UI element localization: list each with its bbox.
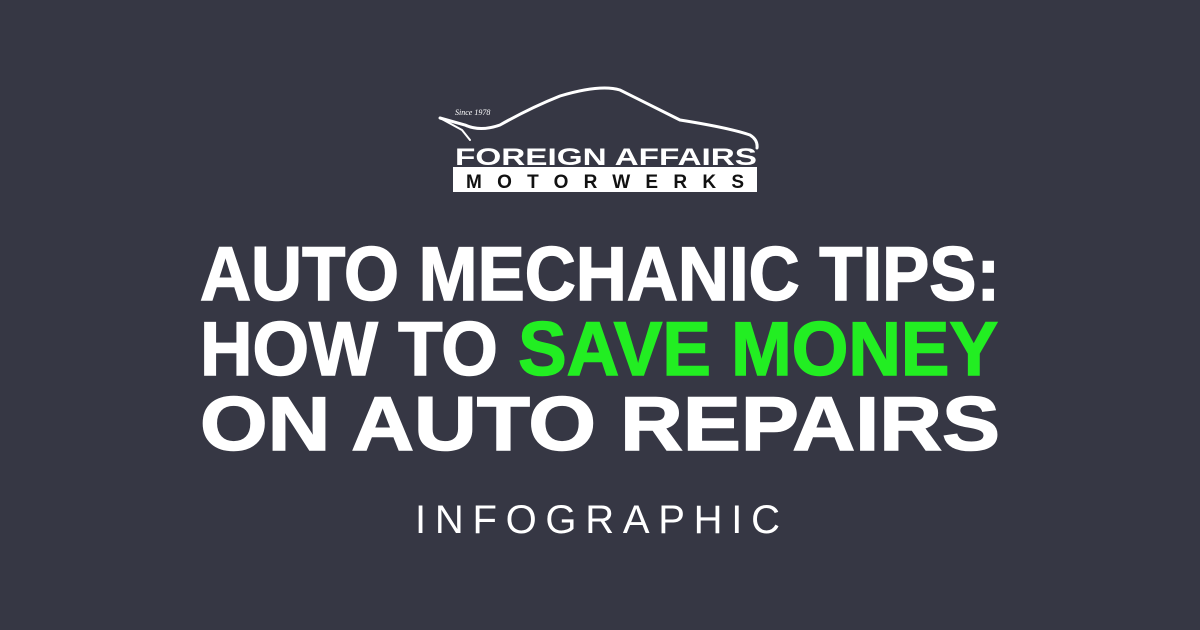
- title line 1: AUTO MECHANIC TIPS:: [200, 232, 1000, 317]
- logo: [440, 88, 757, 193]
- subtitle: INFOGRAPHIC: [415, 498, 780, 542]
- box: motorwerks: MOTORWERKS: [466, 172, 744, 193]
- text: foreign affairs: FOREIGN AFFAIRS: [455, 144, 757, 171]
- title: [200, 232, 1000, 467]
- text: since 1978: Since 1978: [455, 108, 490, 117]
- title line 3: ON AUTO REPAIRS: [200, 382, 1000, 467]
- icon: car outline: [440, 88, 757, 148]
- title line 2: HOW TO SAVE MONEY: [200, 307, 998, 392]
